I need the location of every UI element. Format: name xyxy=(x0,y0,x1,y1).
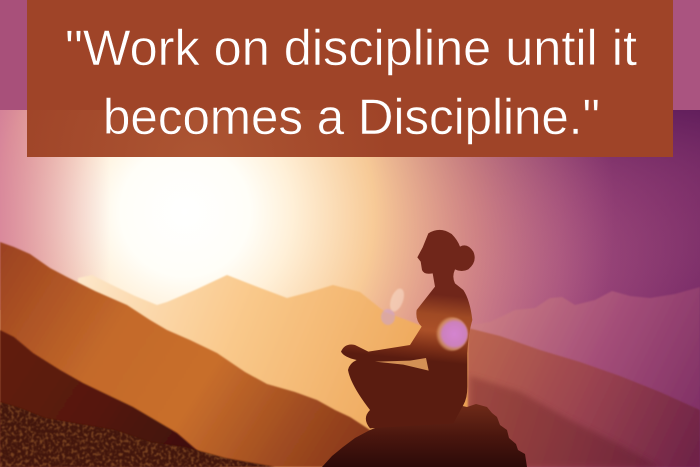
top band right xyxy=(673,0,700,110)
dark foreground hill xyxy=(0,330,220,467)
lens flare on torso xyxy=(434,317,468,351)
middle ridge right xyxy=(468,328,700,467)
foreground grass xyxy=(0,402,275,467)
title panel xyxy=(27,0,673,157)
meditating person silhouette xyxy=(341,230,475,428)
distant mountains right xyxy=(470,287,700,420)
title line 1: "Work on discipline until it xyxy=(65,20,637,76)
small lens flares xyxy=(381,287,407,325)
title line 2: becomes a Discipline." xyxy=(103,89,600,145)
large mountain left xyxy=(0,242,372,467)
gap between arm and leg xyxy=(375,358,429,371)
top band left xyxy=(0,0,27,110)
lower ridge right xyxy=(470,376,660,467)
rock xyxy=(322,404,527,467)
distant mountains center xyxy=(78,275,480,467)
